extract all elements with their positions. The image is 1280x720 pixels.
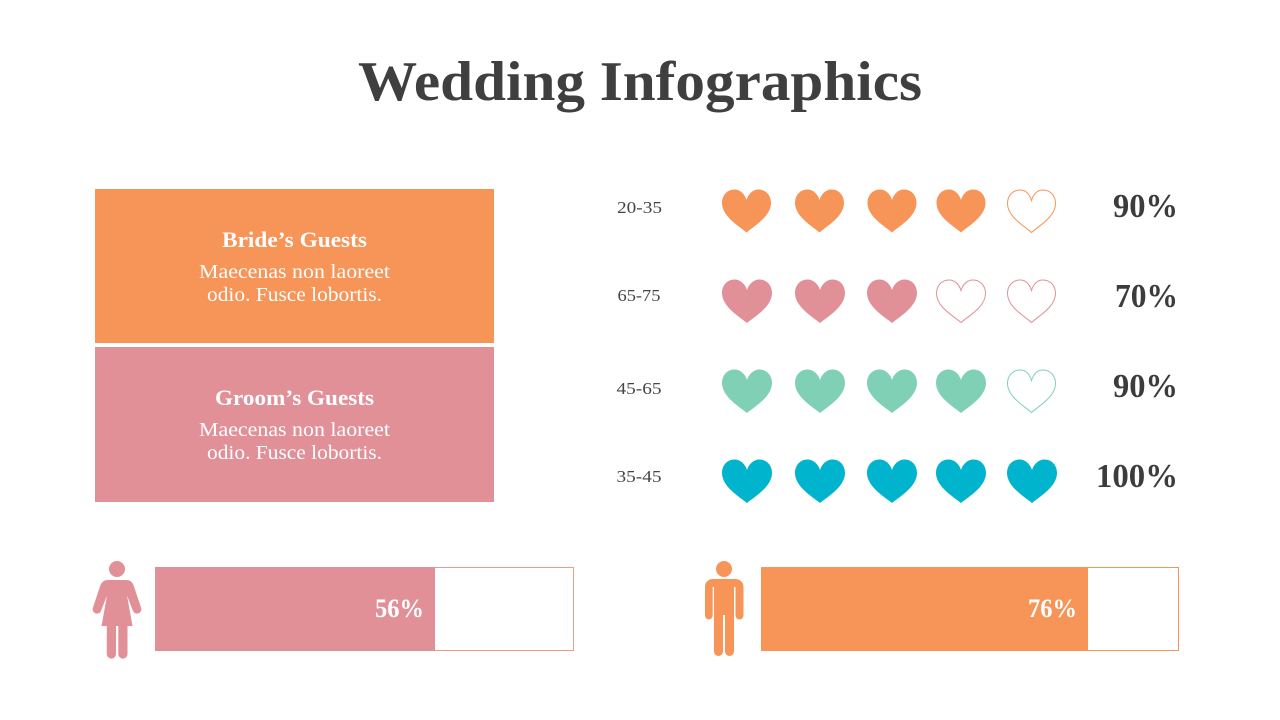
bar: woman 56%	[155, 567, 574, 651]
icon: man	[705, 561, 744, 656]
label: 20-35: 20-35	[617, 198, 662, 217]
text block: groom's description	[199, 419, 390, 464]
value: 100%: 100%	[1096, 458, 1178, 495]
value: 70%: 70%	[1115, 278, 1178, 315]
panel: groom's guests	[95, 347, 494, 502]
text block: bride's description: odio. Fusce lobortis.	[207, 284, 382, 306]
icon: woman	[93, 561, 141, 659]
value: 90%: 90%	[1113, 188, 1178, 225]
hearts: 4 filled, 1 outline	[722, 370, 1056, 413]
text block: bride's description	[199, 261, 390, 306]
row: age 65-75	[618, 278, 1178, 323]
heading: groom's guests: Groom’s Guests	[215, 385, 374, 410]
label: 45-65: 45-65	[616, 379, 662, 398]
bar: man 76%	[761, 567, 1178, 651]
hearts: 4 filled, 1 outline	[722, 190, 1056, 232]
row: age 45-65	[616, 368, 1178, 413]
row: age 20-35	[617, 188, 1178, 232]
hearts: 3 filled, 2 outline	[722, 280, 1056, 323]
row: age 35-45	[616, 458, 1178, 503]
value: 76%: 76%	[1028, 594, 1077, 623]
hearts: 5 filled	[722, 460, 1057, 503]
text block: groom's description: Maecenas non laoreet	[199, 419, 390, 441]
text block: bride's description: Maecenas non laoreet	[199, 261, 390, 283]
text block: groom's description: odio. Fusce lobortis.	[207, 442, 382, 464]
value: 90%: 90%	[1113, 368, 1178, 405]
panel: bride's guests	[95, 189, 494, 343]
label: 65-75: 65-75	[618, 286, 660, 305]
value: 56%: 56%	[375, 594, 424, 623]
label: 35-45: 35-45	[616, 467, 662, 486]
heading: bride's guests: Bride’s Guests	[222, 227, 367, 252]
title: Wedding Infographics	[358, 51, 922, 113]
